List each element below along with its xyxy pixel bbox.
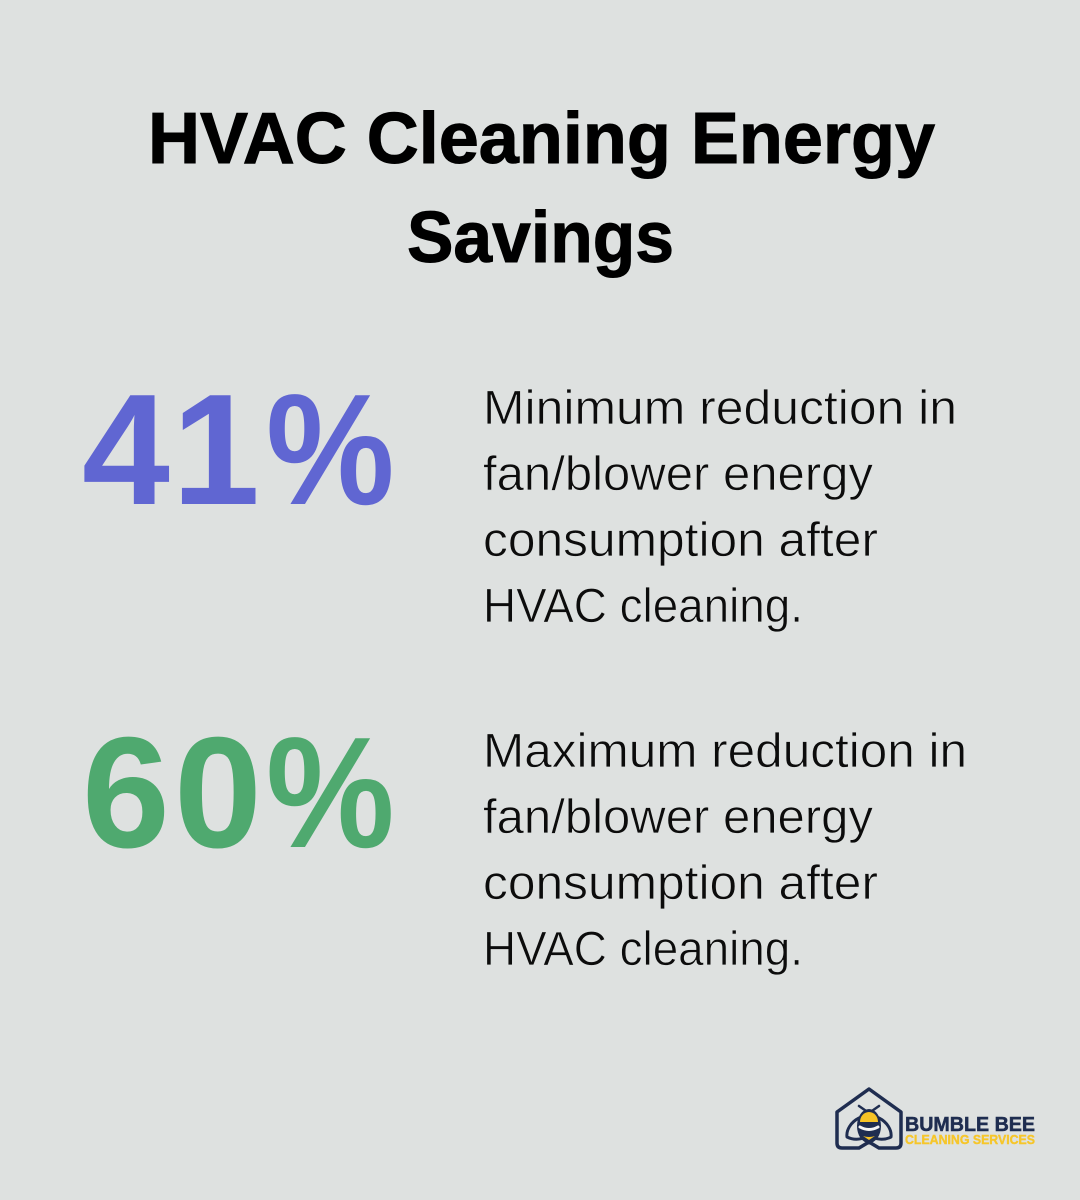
- description: maximum reduction: [483, 725, 967, 976]
- panel: 41% statistic: [82, 362, 957, 633]
- description: maximum reduction: HVAC cleaning.: [483, 923, 803, 976]
- description: minimum reduction: HVAC cleaning.: [483, 580, 803, 633]
- description: maximum reduction: Maximum reduction in: [483, 725, 967, 778]
- description: maximum reduction: fan/blower energy: [483, 791, 873, 844]
- stat: 60%: %: [266, 705, 395, 881]
- stat: 41%: %: [266, 362, 395, 538]
- logo wordmark: BUMBLE BEE: [905, 1114, 1035, 1136]
- stat: 60%: 60: [82, 705, 262, 881]
- title: Savings: [407, 198, 674, 278]
- title: [148, 99, 935, 278]
- panel: 60% statistic: [82, 705, 967, 976]
- stat: 41%: 41: [82, 362, 260, 538]
- stat: 60%: [82, 705, 395, 881]
- stat: 41%: [82, 362, 395, 538]
- description: minimum reduction: fan/blower energy: [483, 448, 873, 501]
- description: maximum reduction: consumption after: [483, 857, 878, 910]
- icon: house with bee: [837, 1089, 901, 1148]
- logo: Bumble Bee Cleaning Services: [837, 1089, 1035, 1148]
- description: minimum reduction: [483, 382, 957, 633]
- description: minimum reduction: Minimum reduction in: [483, 382, 957, 435]
- title: HVAC Cleaning Energy: [148, 99, 935, 179]
- logo tagline: CLEANING SERVICES: [905, 1132, 1035, 1147]
- description: minimum reduction: consumption after: [483, 514, 878, 567]
